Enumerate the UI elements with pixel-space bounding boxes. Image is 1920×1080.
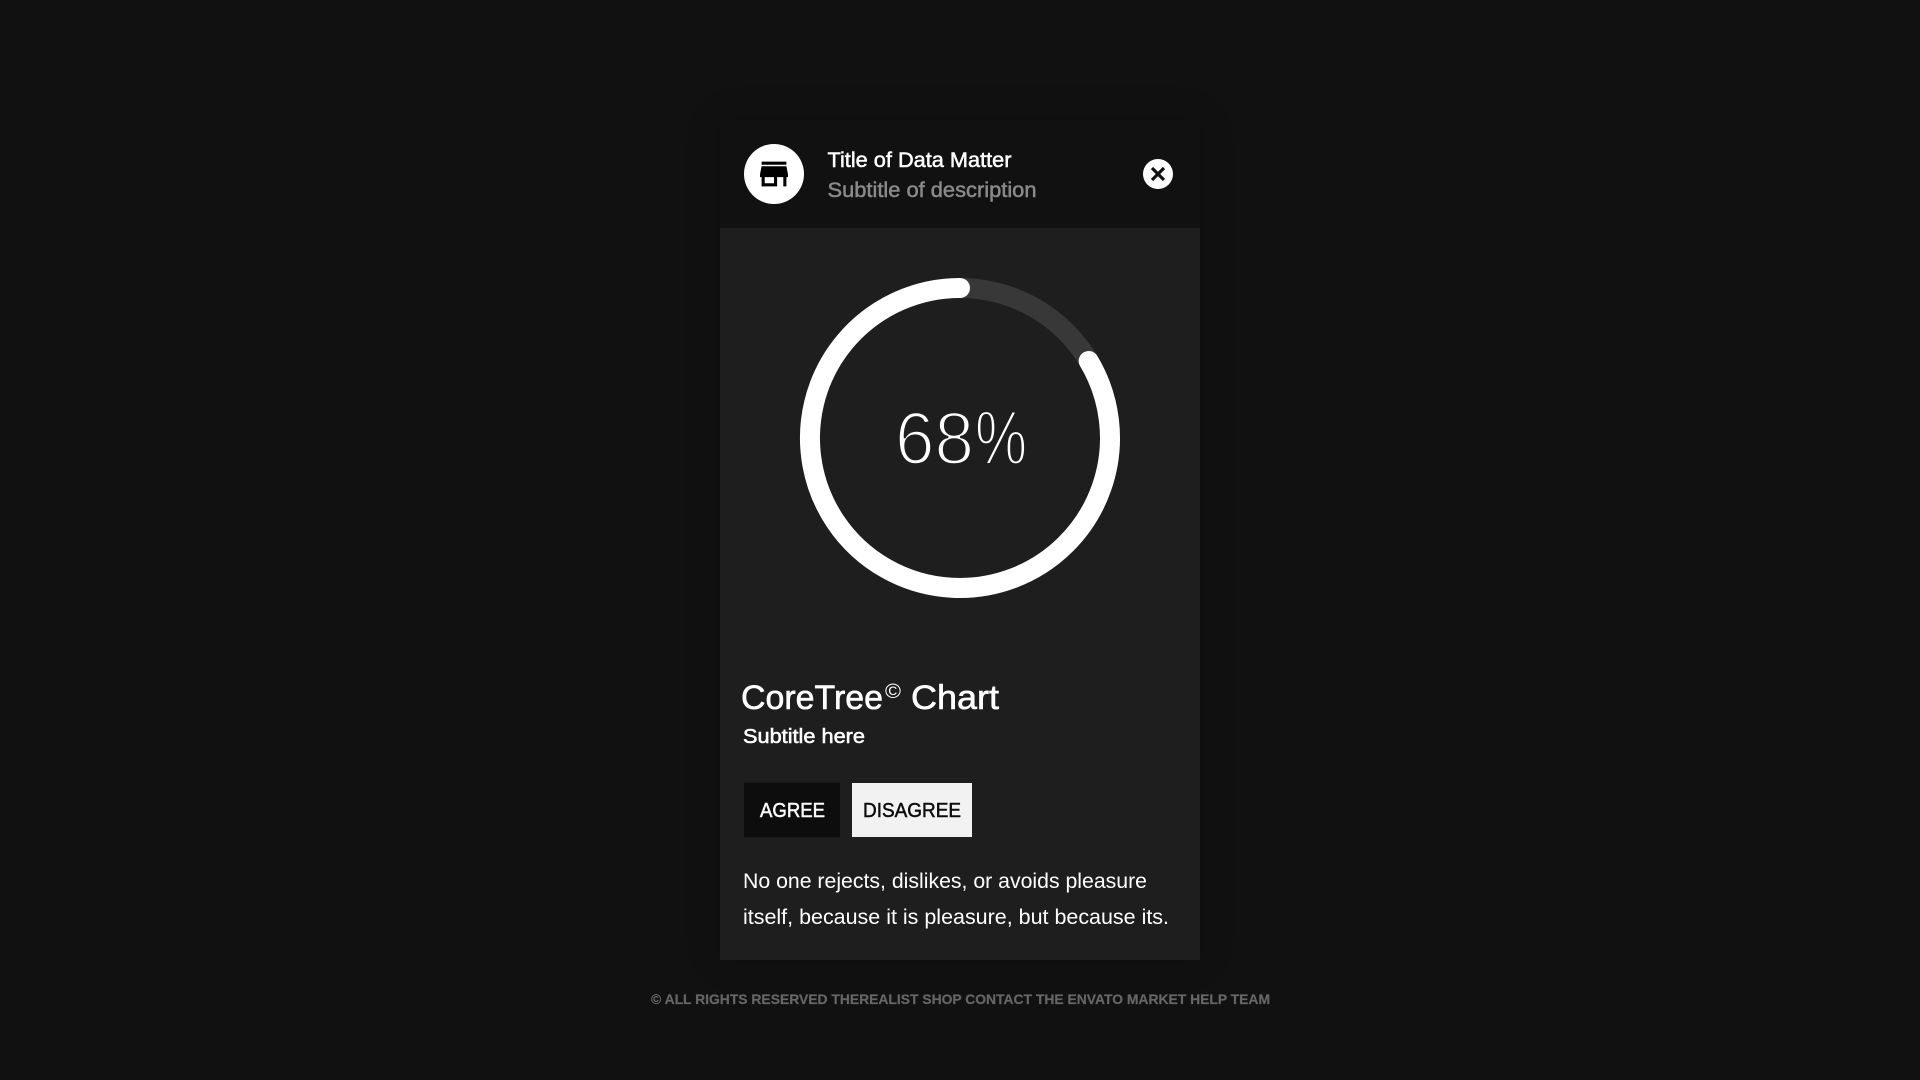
percentage value: % (975, 396, 1027, 481)
description text: itself, because it is pleasure, but because its. (743, 906, 1169, 929)
button: disagree (852, 783, 972, 837)
chart: radial progress ring (810, 288, 1110, 588)
percentage value (895, 396, 1027, 481)
chart subtitle: Subtitle here (743, 726, 865, 748)
footer copyright: © ALL RIGHTS RESERVED THEREALIST SHOP CONTACT THE ENVATO MARKET HELP TEAM (651, 991, 1270, 1007)
chart heading (741, 679, 1000, 717)
header title: Title of Data Matter (828, 149, 1012, 172)
icon: close button (1143, 159, 1173, 189)
panel: card body (720, 228, 1200, 960)
chart heading: CoreTree (741, 679, 883, 717)
percentage value: 68 (895, 397, 974, 480)
panel: data card (720, 120, 1200, 960)
icon: store (744, 144, 804, 204)
header subtitle: Subtitle of description (828, 179, 1036, 202)
chart heading: © (885, 681, 901, 703)
button: agree: AGREE (760, 799, 825, 822)
description text: No one rejects, dislikes, or avoids pleasure (743, 870, 1147, 893)
button: agree (744, 783, 840, 837)
description text (743, 870, 1169, 929)
button: disagree: DISAGREE (863, 799, 961, 822)
chart heading: Chart (911, 679, 1000, 717)
panel: card header (720, 120, 1200, 228)
